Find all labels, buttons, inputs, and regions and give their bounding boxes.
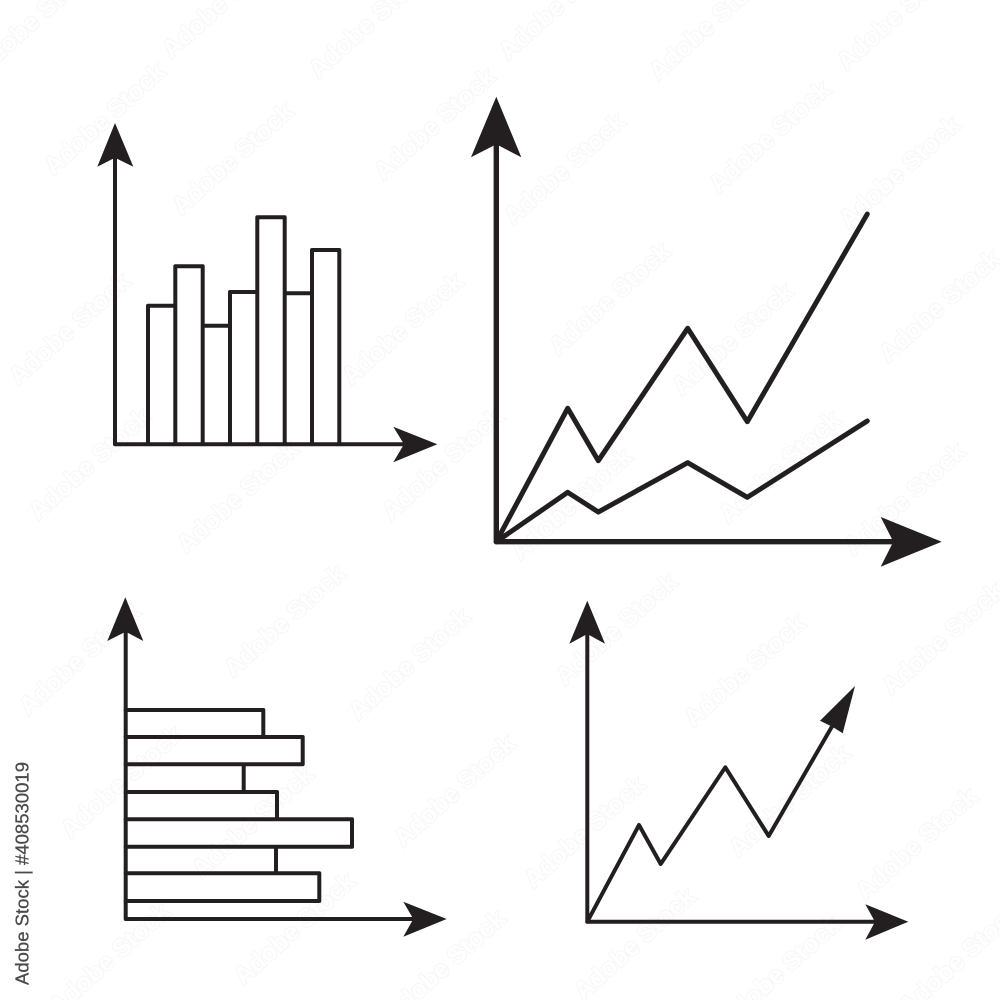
chart: two-line growth chart	[471, 97, 942, 567]
chart: vertical bar chart	[97, 123, 437, 462]
text: Adobe Stock	[369, 62, 501, 186]
axes	[587, 625, 880, 922]
arrowhead: horizontal axis	[403, 902, 447, 937]
text: Adobe Stock	[506, 442, 638, 566]
bars	[148, 217, 339, 444]
bars	[126, 710, 352, 901]
arrowhead: vertical axis	[97, 123, 133, 167]
text: Adobe Stock	[499, 107, 631, 231]
text: Adobe Stock	[851, 782, 983, 906]
arrowhead: rising line	[820, 686, 855, 733]
arrowhead: horizontal axis	[393, 427, 437, 462]
text: Adobe Stock	[679, 609, 811, 733]
text: Adobe Stock	[229, 867, 361, 991]
axes	[115, 150, 410, 444]
text: Adobe Stock	[551, 567, 683, 691]
text: Adobe Stock	[389, 729, 521, 853]
text: Adobe Stock	[337, 267, 469, 391]
text: Adobe Stock	[704, 75, 836, 199]
arrowhead: vertical axis	[107, 597, 143, 641]
text: Adobe Stock	[834, 110, 966, 234]
arrowhead: horizontal axis	[881, 517, 942, 567]
text: Adobe Stock	[839, 437, 971, 561]
arrowhead: horizontal axis	[865, 904, 908, 940]
text: Adobe Stock	[667, 277, 799, 401]
chart: horizontal bar chart	[107, 597, 447, 937]
arrowhead: vertical axis	[471, 97, 521, 157]
text: Adobe Stock	[4, 267, 136, 391]
text: Adobe Stock	[56, 720, 188, 844]
text: Adobe Stock	[219, 559, 351, 683]
upper line	[496, 214, 867, 542]
text: Adobe Stock	[344, 602, 476, 726]
lower line	[496, 421, 867, 542]
text: Adobe Stock	[519, 770, 651, 894]
text: Adobe Stock	[187, 760, 319, 884]
axes	[126, 625, 420, 919]
text: Adobe Stock	[24, 402, 156, 526]
rising line	[587, 723, 834, 922]
text: Adobe Stock	[167, 97, 299, 221]
text: Adobe Stock	[14, 597, 146, 721]
text: Adobe Stock	[724, 739, 856, 863]
text: Adobe Stock	[544, 237, 676, 361]
side credit text: Adobe Stock | #408530019	[12, 762, 32, 985]
text: Adobe Stock	[39, 57, 171, 181]
axes	[496, 130, 900, 542]
text: Adobe Stock	[377, 402, 509, 526]
text: Adobe Stock	[172, 435, 304, 559]
chart: single rising line with arrow	[569, 601, 908, 940]
text: Adobe Stock	[714, 405, 846, 529]
arrowhead: vertical axis	[569, 601, 605, 644]
